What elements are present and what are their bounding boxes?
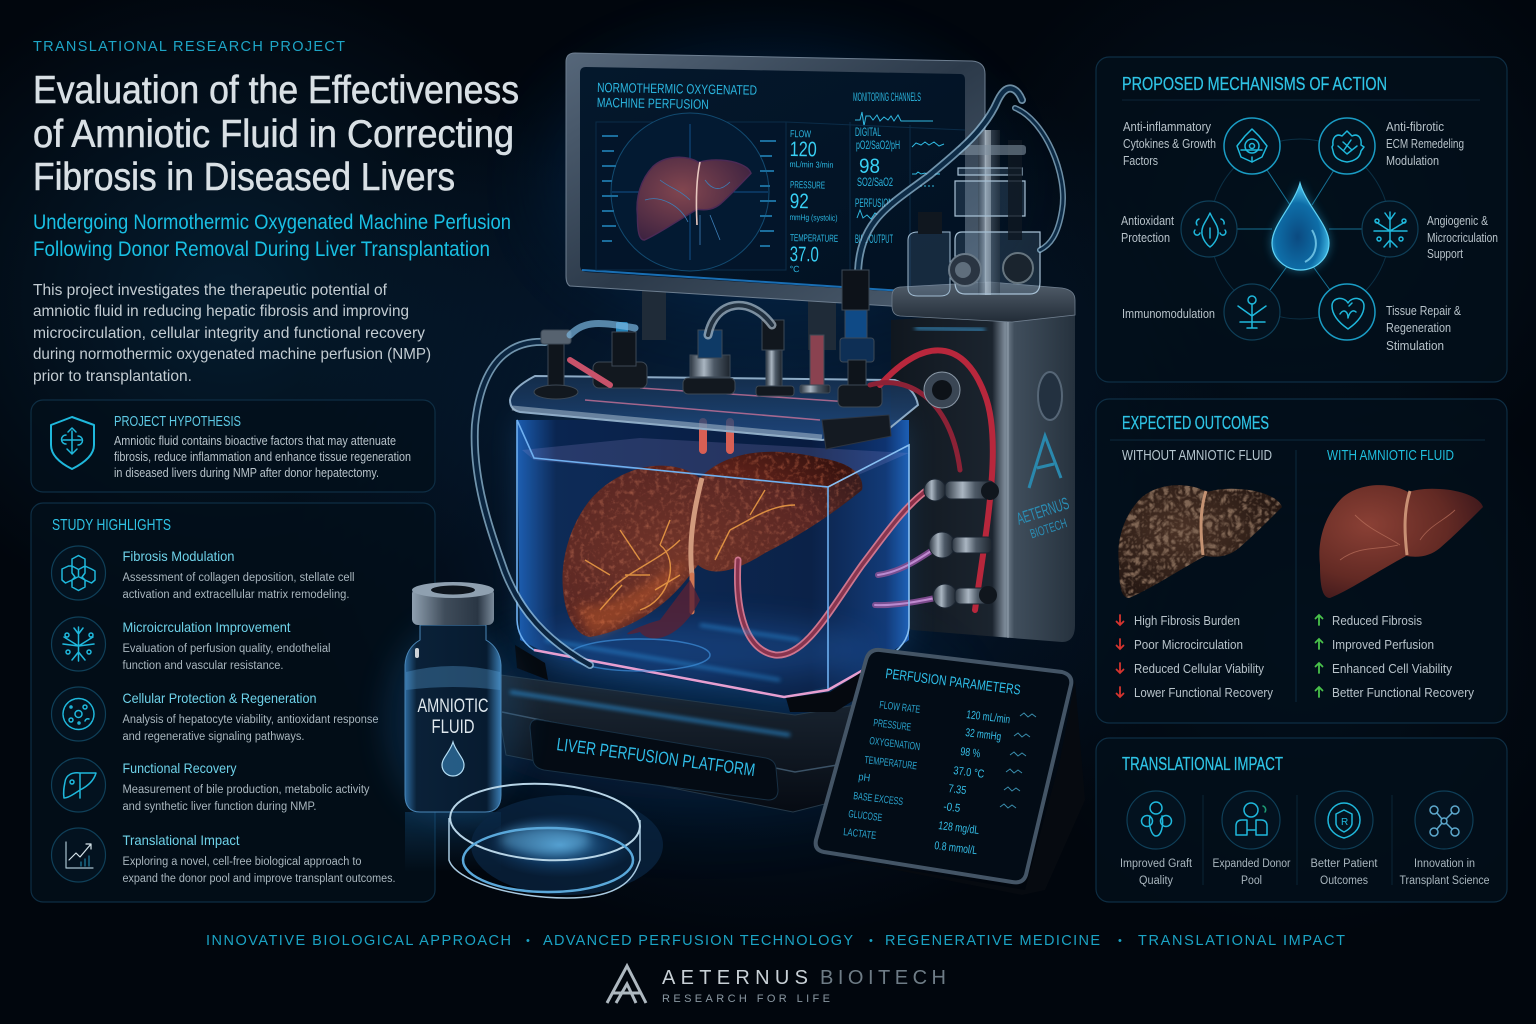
impact: innovation in transplant science: Transplant Science <box>1400 875 1490 887</box>
mechanism node: tissue repair: Regeneration <box>1386 321 1451 335</box>
panel: translational impact <box>1096 738 1507 902</box>
tablet rows: 32 mmHg <box>965 727 1002 743</box>
vial label <box>418 696 488 738</box>
mechanism node: immunomodulation: Immunomodulation <box>1122 307 1215 321</box>
with list: Better Functional Recovery <box>1332 685 1474 700</box>
mechanism node: tissue repair: Stimulation <box>1386 339 1444 353</box>
item: microcirculation improvement <box>52 617 330 672</box>
platform base <box>460 640 1010 812</box>
mechanisms heading: PROPOSED MECHANISMS OF ACTION <box>1122 74 1387 94</box>
tablet rows: 128 mg/dL <box>938 820 980 837</box>
liver: healthy <box>1319 485 1483 598</box>
footer tagline: • <box>1118 935 1122 947</box>
without list <box>1134 613 1273 700</box>
platform label plate: LIVER PERFUSION PLATFORM <box>555 734 756 780</box>
footer tagline: ADVANCED PERFUSION TECHNOLOGY <box>543 933 853 949</box>
tablet rows <box>843 699 1011 857</box>
monitor <box>560 53 985 350</box>
hypothesis text: fibrosis, reduce inflammation and enhance tissue regeneration <box>114 450 411 464</box>
footer tagline: • <box>526 935 530 947</box>
item: cellular protection and regeneration: Cellular Protection & Regeneration <box>122 690 316 706</box>
item: translational impact: expand the donor pool and improve transplant outcomes. <box>122 873 396 885</box>
machine brand text: BIOTECH <box>1028 515 1069 541</box>
study highlights heading: STUDY HIGHLIGHTS <box>52 517 171 534</box>
panel: project hypothesis <box>31 400 435 492</box>
item: cellular protection and regeneration: Analysis of hepatocyte viability, antioxidant response <box>122 714 378 726</box>
tablet rows: 120 mL/min <box>966 709 1011 726</box>
monitor: oxygenation and wave readouts: pO2/SaO2/pH <box>856 138 900 152</box>
fitting group <box>534 270 882 407</box>
subtitle: Undergoing Normothermic Oxygenated Machine Perfusion <box>33 211 511 234</box>
tablet rows: TEMPERATURE <box>864 754 918 772</box>
tablet heading: PERFUSION PARAMETERS <box>885 665 1022 698</box>
footer tagline <box>206 933 1345 949</box>
monitor: pressure: PRESSURE <box>790 180 825 192</box>
machine brand text <box>1014 494 1076 544</box>
item: fibrosis modulation: Assessment of collagen deposition, stellate cell <box>122 572 354 584</box>
machine brand text: AETERNUS <box>1014 494 1071 529</box>
eyebrow: translational research project: TRANSLATIONAL RESEARCH PROJECT <box>33 39 345 55</box>
mechanism node: antioxidant protection: Protection <box>1121 231 1170 245</box>
main title: Evaluation of the Effectiveness <box>33 69 519 112</box>
item: translational impact <box>52 828 396 885</box>
mechanism node: anti-inflammatory <box>1123 118 1280 174</box>
logo wordmark: AETERNUS <box>662 967 808 989</box>
impact: expanded donor pool: Pool <box>1241 875 1262 887</box>
item: microcirculation improvement: Microicrculation Improvement <box>122 619 291 635</box>
tablet rows: LACTATE <box>843 826 877 842</box>
intro paragraph <box>33 282 431 385</box>
monitor: flow: mL/min 3/min <box>789 159 834 170</box>
tablet rows: FLOW RATE <box>879 699 921 716</box>
item: fibrosis modulation <box>52 546 354 601</box>
item: functional recovery: and synthetic liver function during NMP. <box>122 801 316 813</box>
impact: expanded donor pool <box>1212 791 1291 887</box>
impact: better patient outcomes: Better Patient <box>1310 858 1378 870</box>
icons: green up arrows <box>1316 615 1322 697</box>
tablet rows: 37.0 °C <box>953 765 985 781</box>
monitor heading: NORMOTHERMIC OXYGENATED <box>597 80 757 98</box>
monitor: pressure: mmHg (systolic) <box>789 212 838 223</box>
impact: innovation in transplant science <box>1400 791 1490 887</box>
perfusion tank <box>515 420 950 712</box>
tablet rows: BASE EXCESS <box>853 790 904 808</box>
item: cellular protection and regeneration <box>52 687 378 743</box>
monitor: temperature: °C <box>789 264 800 274</box>
amniotic fluid vial <box>383 582 523 872</box>
monitor: oxygenation and wave readouts: 98 <box>859 155 880 178</box>
intro paragraph: amniotic fluid in reducing hepatic fibrosis and improving <box>33 303 409 320</box>
mechanism node: angiogenic: Microcriculation <box>1427 231 1498 245</box>
main title <box>33 69 519 199</box>
tablet rows: PRESSURE <box>873 717 912 734</box>
footer logo <box>607 966 946 1005</box>
with list: Reduced Fibrosis <box>1332 613 1422 628</box>
mechanism node: angiogenic <box>1362 201 1498 261</box>
with amniotic fluid column: WITH AMNIOTIC FLUID <box>1327 448 1454 464</box>
tablet rows: pH <box>858 771 871 784</box>
mechanism node: angiogenic: Support <box>1427 247 1463 261</box>
center drop <box>1272 183 1329 270</box>
bubble trap column and tubing <box>858 88 1063 296</box>
intro paragraph: microcirculation, cellular integrity and functional recovery <box>33 325 425 342</box>
tablet rows: 98 % <box>960 746 981 760</box>
with amniotic fluid column <box>1316 448 1483 700</box>
vial label: AMNIOTIC <box>418 696 488 717</box>
monitor heading: MACHINE PERFUSION <box>597 95 709 112</box>
without list: Lower Functional Recovery <box>1134 685 1273 700</box>
item: functional recovery: Functional Recovery <box>122 760 236 776</box>
hypothesis heading: PROJECT HYPOTHESIS <box>114 414 241 430</box>
icon: dial <box>1038 372 1062 420</box>
with list: Enhanced Cell Viability <box>1332 661 1452 676</box>
impact: improved graft quality: Quality <box>1139 875 1173 887</box>
tank feet corners <box>515 645 870 712</box>
machine logo <box>1029 436 1061 488</box>
monitor: pressure <box>789 180 838 223</box>
monitor heading <box>597 80 757 113</box>
monitor: oxygenation and wave readouts <box>786 90 965 290</box>
mechanism node: angiogenic: Angiogenic & <box>1427 214 1489 228</box>
mechanism node: antioxidant protection: Antioxidant <box>1121 214 1174 228</box>
item: functional recovery: Measurement of bile production, metabolic activity <box>122 784 370 796</box>
mechanism node: anti-fibrotic: ECM Remedeling <box>1386 137 1464 151</box>
tube: arc fittings <box>570 305 993 610</box>
intro paragraph: prior to transplantation. <box>33 368 192 385</box>
monitor: pressure: 92 <box>790 190 809 213</box>
icons: red down arrows <box>1116 615 1124 697</box>
impact: expanded donor pool: Expanded Donor <box>1212 858 1291 870</box>
footer tagline: • <box>869 935 873 947</box>
panel: proposed mechanisms of action <box>1096 57 1507 382</box>
item: microcirculation improvement: function and vascular resistance. <box>122 660 284 672</box>
translational impact heading: TRANSLATIONAL IMPACT <box>1122 754 1283 774</box>
monitor: oxygenation and wave readouts: SO2/SaO2 <box>857 175 893 189</box>
monitor: oxygenation and wave readouts: BILE OUTPUT <box>855 232 893 246</box>
perfusion machine body <box>891 282 1076 642</box>
monitor: oxygenation and wave readouts: MONITORING CHANNELS <box>853 90 921 104</box>
impact: improved graft quality <box>1120 791 1193 887</box>
logo wordmark suffix: BIOITECH <box>820 967 946 989</box>
outcomes heading: EXPECTED OUTCOMES <box>1122 413 1269 433</box>
tablet rows: 0.8 mmol/L <box>934 840 978 857</box>
intro paragraph: during normothermic oxygenated machine perfusion (NMP) <box>33 346 431 363</box>
perfusion parameters tablet <box>816 650 1085 895</box>
impact: improved graft quality: Improved Graft <box>1120 858 1193 870</box>
mechanism node: anti-inflammatory: Anti-inflammatory <box>1123 120 1212 134</box>
footer tagline: REGENERATIVE MEDICINE <box>885 933 1100 949</box>
icon: vial drop <box>442 742 464 776</box>
monitor: flow: FLOW <box>790 129 812 140</box>
monitor: radar with liver <box>596 113 786 271</box>
without amniotic fluid column: WITHOUT AMNIOTIC FLUID <box>1122 448 1272 464</box>
left tube <box>475 342 590 665</box>
liver in tank <box>562 452 862 638</box>
hypothesis text: in diseased livers during NMP after donor hepatectomy. <box>114 466 379 480</box>
mechanism node: tissue repair: Tissue Repair & <box>1386 304 1462 318</box>
impact: better patient outcomes <box>1310 791 1378 887</box>
tube: upper loop <box>858 88 1063 272</box>
monitor: temperature: TEMPERATURE <box>790 233 838 245</box>
tank front surfaces <box>517 420 828 697</box>
monitor: temperature <box>789 233 838 275</box>
subtitle: Following Donor Removal During Liver Transplantation <box>33 238 490 261</box>
tablet rows: OXYGENATION <box>869 735 921 753</box>
impact: better patient outcomes: R <box>1341 817 1348 828</box>
mechanism node: anti-fibrotic: Anti-fibrotic <box>1386 120 1444 134</box>
subtitle <box>33 211 511 261</box>
without list: High Fibrosis Burden <box>1134 613 1240 628</box>
intro paragraph: This project investigates the therapeutic potential of <box>33 282 388 299</box>
mechanism node: anti-inflammatory: Factors <box>1123 154 1158 168</box>
platform label plate <box>530 720 778 800</box>
without list: Reduced Cellular Viability <box>1134 661 1264 676</box>
footer tagline: INNOVATIVE BIOLOGICAL APPROACH <box>206 933 511 949</box>
mechanism node: antioxidant protection <box>1121 201 1237 257</box>
mechanism node: anti-fibrotic: Modulation <box>1386 154 1439 168</box>
item: translational impact: Exploring a novel, cell-free biological approach to <box>122 856 362 868</box>
tube: red loop in tank <box>703 422 950 655</box>
item: fibrosis modulation: Fibrosis Modulation <box>122 548 234 564</box>
without amniotic fluid column <box>1116 448 1282 700</box>
item: cellular protection and regeneration: and regenerative signaling pathways. <box>122 731 304 743</box>
vial label: FLUID <box>432 717 474 738</box>
tank lid and fittings <box>510 270 999 610</box>
with list: Improved Perfusion <box>1332 637 1434 652</box>
connector group <box>924 372 999 608</box>
tablet sparklines <box>1000 713 1036 808</box>
mechanism node: immunomodulation <box>1122 284 1280 340</box>
impact: innovation in transplant science: Innovation in <box>1414 858 1475 870</box>
logo tagline: RESEARCH FOR LIFE <box>662 993 830 1005</box>
impact: better patient outcomes: Outcomes <box>1320 875 1368 887</box>
item: functional recovery <box>52 758 370 813</box>
main title: of Amniotic Fluid in Correcting <box>33 113 514 156</box>
monitor: flow <box>789 129 834 170</box>
panel: study highlights <box>31 503 435 902</box>
mechanism diagram connectors <box>1210 139 1390 319</box>
liver: fibrotic <box>1118 485 1282 598</box>
hypothesis text <box>114 434 411 480</box>
without list: Poor Microcirculation <box>1134 637 1243 652</box>
tablet rows: 7.35 <box>948 783 967 797</box>
mechanism node: anti-fibrotic <box>1319 118 1464 174</box>
tablet rows: GLUCOSE <box>848 808 883 824</box>
item: microcirculation improvement: Evaluation of perfusion quality, endothelial <box>122 643 330 655</box>
monitor: flow: 120 <box>790 138 817 161</box>
tablet rows: -0.5 <box>943 801 961 815</box>
monitor: oxygenation and wave readouts: DIGITAL <box>855 125 881 139</box>
main title: Fibrosis in Diseased Livers <box>33 156 455 199</box>
mechanism node: anti-inflammatory: Cytokines & Growth <box>1123 137 1216 151</box>
mechanism node: tissue repair <box>1319 284 1462 353</box>
item: fibrosis modulation: activation and extracellular matrix remodeling. <box>122 589 350 601</box>
icon: logo triangle <box>607 966 646 1003</box>
hypothesis text: Amniotic fluid contains bioactive factors that may attenuate <box>114 434 396 448</box>
item: translational impact: Translational Impact <box>122 832 240 848</box>
footer tagline: TRANSLATIONAL IMPACT <box>1138 933 1345 949</box>
panel: expected outcomes <box>1096 399 1507 723</box>
with list <box>1332 613 1474 700</box>
petri dish <box>448 779 663 898</box>
monitor: oxygenation and wave readouts: PERFUSION <box>855 196 893 210</box>
icon: shield <box>51 417 94 469</box>
monitor: temperature: 37.0 <box>790 243 819 267</box>
